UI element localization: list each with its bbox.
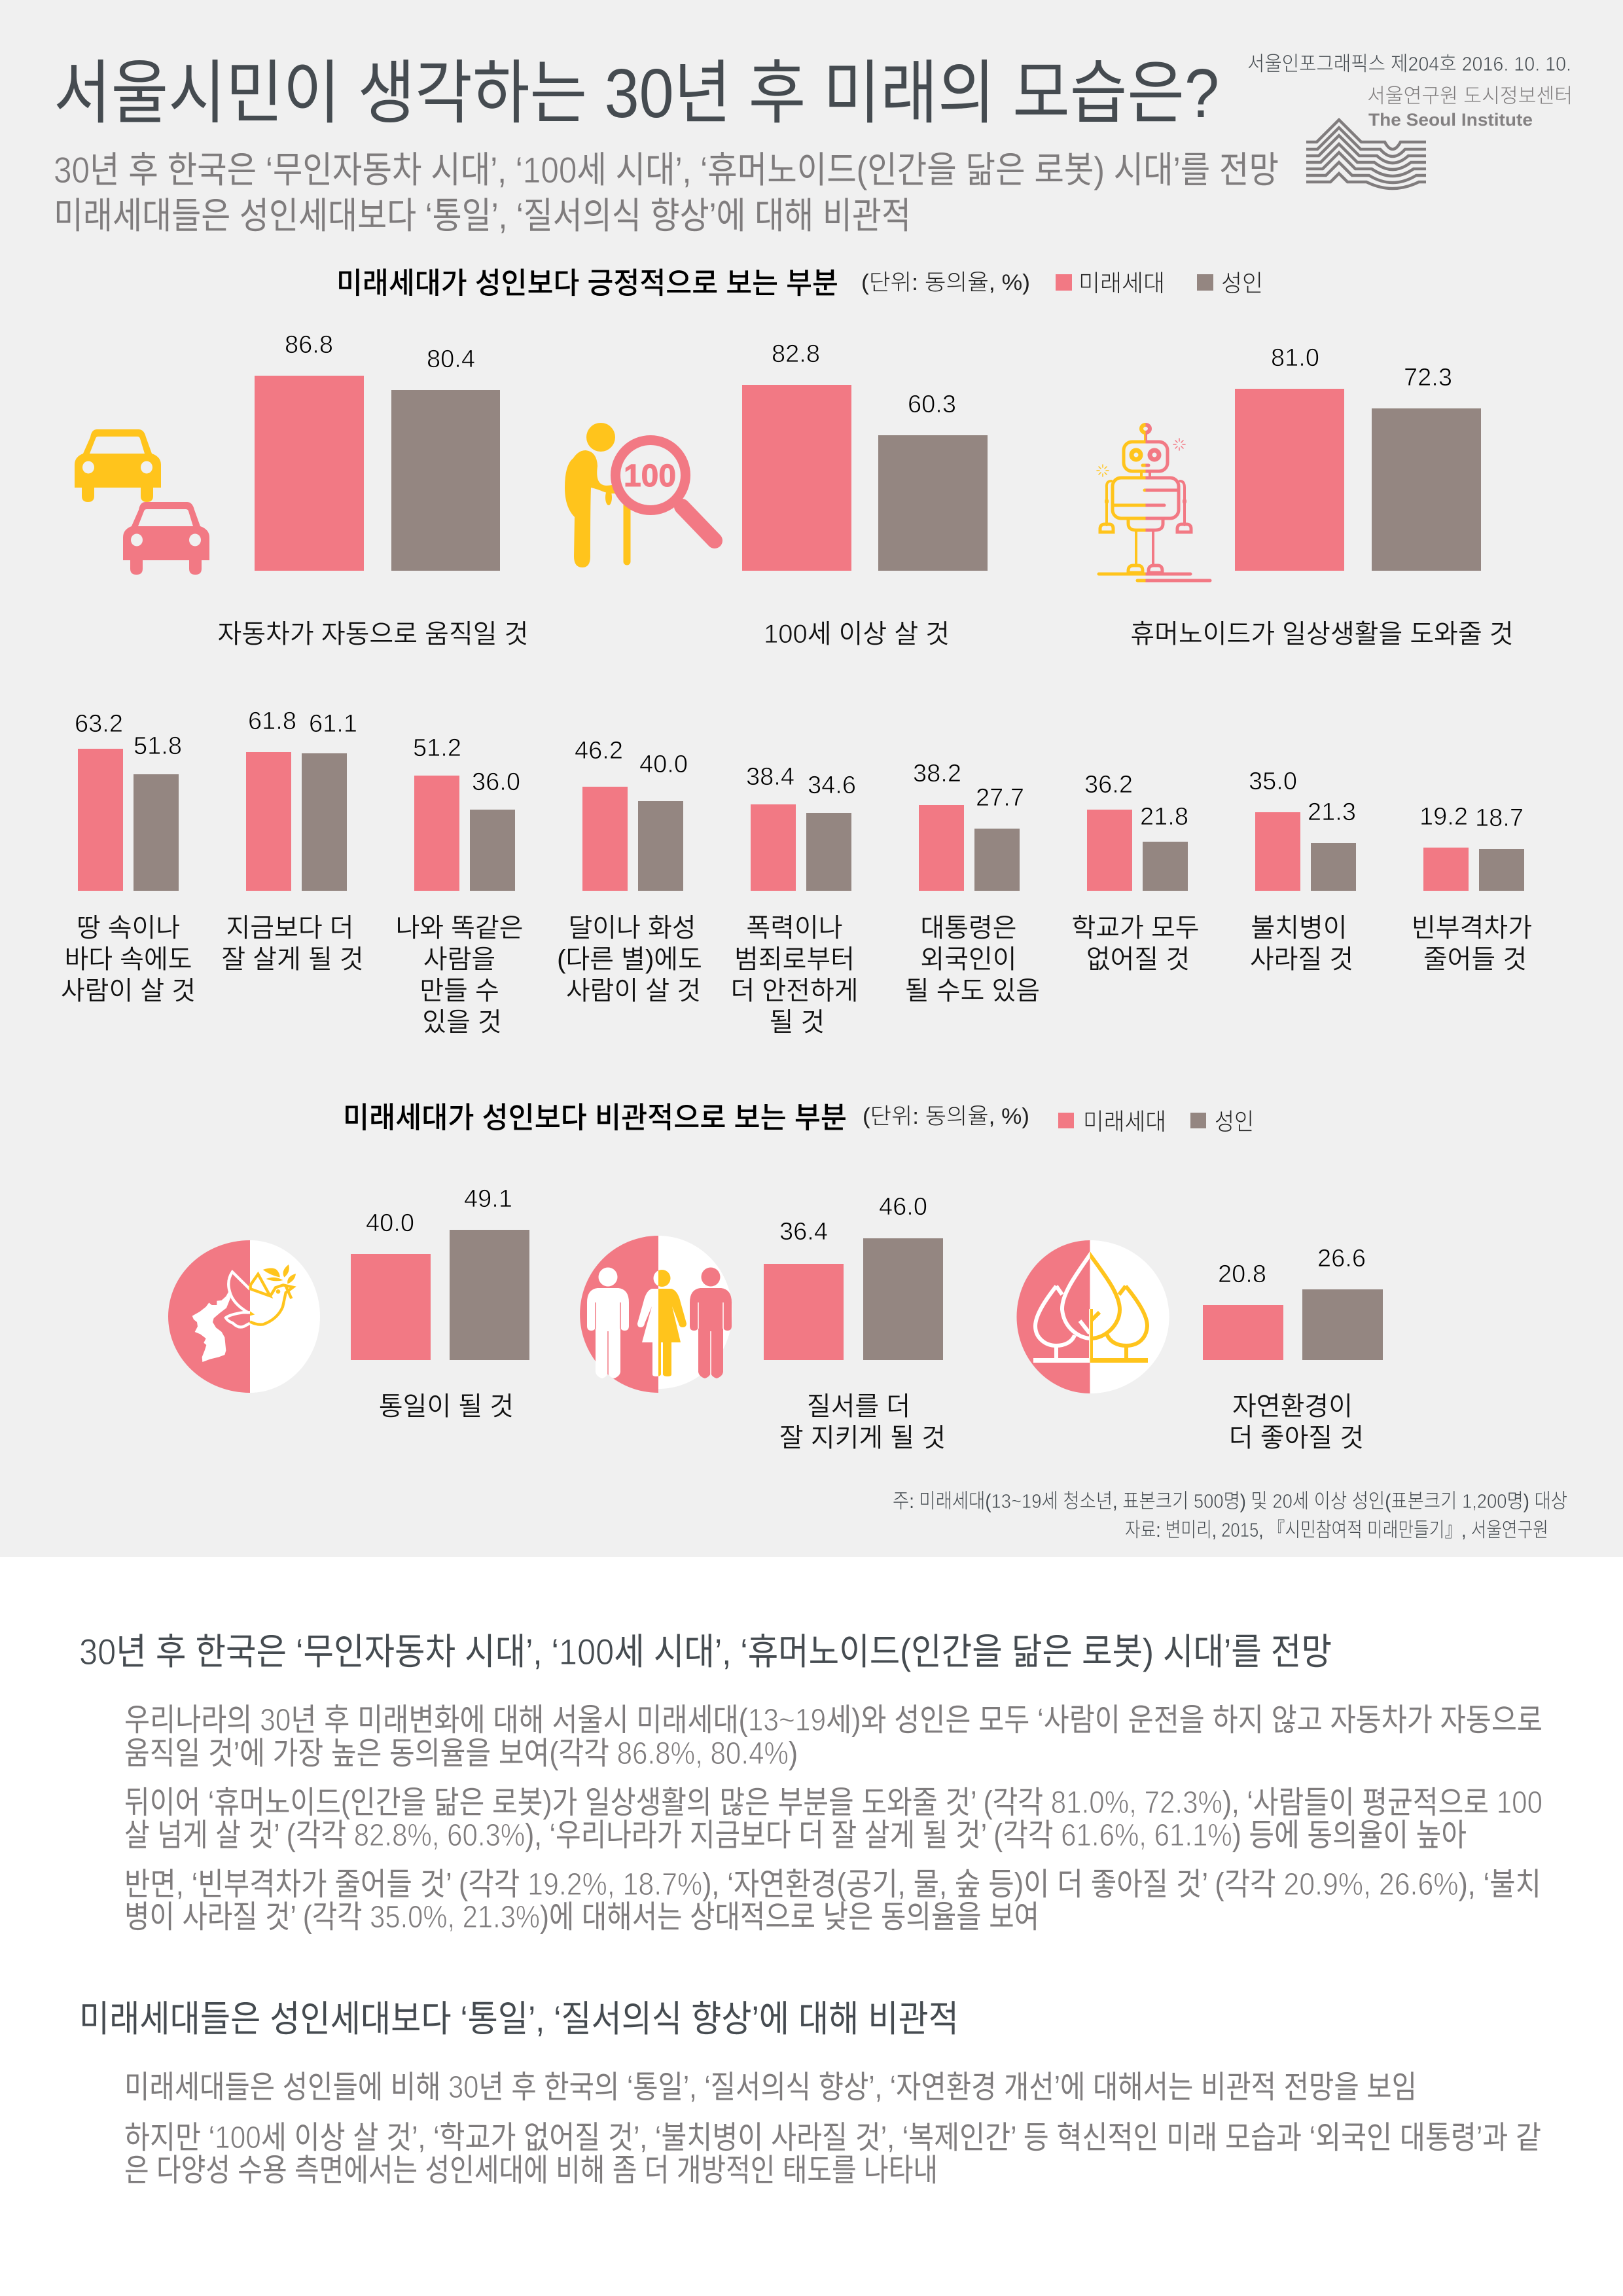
bar chart: incurable disease disappearing: 35.0 (1249, 768, 1297, 795)
bar chart: wealth gap shrinking: 19.2 (1419, 803, 1468, 831)
bar chart: incurable disease disappearing: 21.3 (1308, 798, 1356, 826)
legend: positive section: 성인 (1221, 270, 1263, 296)
icon: two cars (75, 429, 209, 575)
label: foreign president: 외국인이 (920, 945, 1017, 974)
text block: first findings: 우리나라의 30년 후 미래변화에 대해 서울시 미래세대(13~19세)와 성인은 모두 ‘사람이 운전을 하지 않고 자동차가 자동으로 (124, 1703, 1543, 1738)
bar chart: safer from crime (746, 763, 856, 891)
panel: gray header and charts background (0, 0, 1623, 1557)
bar chart: self-driving cars: 80.4 (427, 346, 475, 373)
bar chart: foreign president (913, 760, 1024, 891)
unit note: (단위: 동의율, %) (863, 1104, 1029, 1129)
heading: positive section: 미래세대가 성인보다 긍정적으로 보는 부분 (336, 266, 838, 300)
icon: Seoul Institute logo (1306, 120, 1426, 188)
bar chart: living on other planets (575, 737, 688, 891)
label: schools disappearing (1071, 914, 1200, 974)
bar chart: natural environment: 26.6 (1317, 1245, 1366, 1272)
label: foreign president (905, 914, 1040, 1005)
label: safer from crime: 범죄로부터 (734, 945, 855, 974)
label: natural environment: 더 좋아질 것 (1229, 1424, 1364, 1452)
label: living past 100: 100세 이상 살 것 (764, 620, 950, 649)
text block: first findings: 반면, ‘빈부격차가 줄어들 것’ (각각 19.2%, 18.7%), ‘자연환경(공기, 물, 숲 등)이 더 좋아질 것’ (각각 20.9%, 26.6%), ‘불치 (124, 1867, 1541, 1902)
label: human clones: 나와 똑같은 (395, 914, 524, 942)
label: incurable disease disappearing (1250, 914, 1353, 974)
bar chart: incurable disease disappearing (1249, 768, 1356, 891)
unit note: (단위: 동의율, %) (861, 270, 1030, 295)
bar chart: humanoids: 81.0 (1271, 344, 1319, 372)
bar chart: foreign president: 38.2 (913, 760, 961, 787)
text block: first findings: 살 넘게 살 것’ (각각 82.8%, 60.3%), ‘우리나라가 지금보다 더 잘 살게 될 것’ (각각 61.6%, 61.1%) 등에 동의율이 높아 (124, 1818, 1467, 1853)
label: safer from crime: 더 안전하게 (730, 977, 859, 1005)
label: schools disappearing: 학교가 모두 (1071, 914, 1200, 942)
legend: negative section (1058, 1108, 1254, 1135)
label: living underground or undersea: 바다 속에도 (64, 945, 192, 974)
heading: second findings: 미래세대들은 성인세대보다 ‘통일’, ‘질서의식 향상’에 대해 비관적 (79, 1998, 959, 2039)
text block: first findings: 움직일 것’에 가장 높은 동의율을 보여(각각 86.8%, 80.4%) (124, 1736, 798, 1771)
label: living on other planets: 사람이 살 것 (566, 977, 701, 1005)
heading: negative section: 미래세대가 성인보다 비관적으로 보는 부분 (343, 1101, 847, 1134)
label: foreign president: 될 수도 있음 (905, 977, 1040, 1005)
subtitle (54, 149, 1279, 236)
label: public order: 질서를 더 (807, 1392, 910, 1421)
bar chart: safer from crime: 34.6 (808, 772, 856, 799)
bar chart: better living: 61.8 (248, 708, 296, 735)
subtitle: 30년 후 한국은 ‘무인자동차 시대’, ‘100세 시대’, ‘휴머노이드(인간을 닮은 로봇) 시대’를 전망 (54, 149, 1279, 190)
icon: robot (1097, 425, 1210, 581)
label: wealth gap shrinking (1412, 914, 1532, 974)
legend: positive section (1056, 270, 1263, 296)
footnote (893, 1490, 1567, 1541)
icon: elderly person with magnifier: 100 (624, 459, 676, 493)
label: safer from crime (730, 914, 859, 1037)
bar chart: human clones: 51.2 (413, 734, 461, 762)
legend: negative section: 성인 (1215, 1108, 1254, 1135)
label: public order (779, 1392, 946, 1452)
footnote: 자료: 변미리, 2015, 『시민참여적 미래만들기』, 서울연구원 (1125, 1518, 1548, 1541)
icon: dove and Korean peninsula (168, 1240, 320, 1393)
publisher name: 서울연구원 도시정보센터 (1367, 84, 1573, 107)
publisher name: The Seoul Institute (1368, 110, 1533, 130)
bar chart: better living (246, 708, 357, 891)
bar chart: living past 100 (742, 340, 988, 571)
label: better living: 잘 살게 될 것 (221, 945, 364, 974)
label: schools disappearing: 없어질 것 (1086, 945, 1190, 974)
label: human clones (395, 914, 524, 1037)
bar chart: schools disappearing: 36.2 (1084, 771, 1133, 798)
label: better living (221, 914, 364, 974)
label: public order: 잘 지키게 될 것 (779, 1424, 946, 1452)
bar chart: public order: 46.0 (879, 1193, 927, 1221)
label: human clones: 사람을 (423, 945, 495, 974)
icon: three people (580, 1236, 732, 1393)
icon: elderly person with magnifier (565, 423, 715, 567)
bar chart: safer from crime: 38.4 (746, 763, 794, 791)
bar chart: natural environment (1203, 1245, 1383, 1360)
bar chart: better living: 61.1 (309, 710, 357, 738)
legend: positive section: 미래세대 (1079, 270, 1165, 296)
bar chart: unification: 49.1 (464, 1185, 512, 1213)
label: safer from crime: 폭력이나 (746, 914, 843, 942)
label: human clones: 만들 수 (419, 977, 499, 1005)
label: wealth gap shrinking: 빈부격차가 (1412, 914, 1532, 942)
bar chart: wealth gap shrinking (1419, 803, 1524, 891)
text block: first findings: 뒤이어 ‘휴머노이드(인간을 닮은 로봇)가 일상생활의 많은 부분을 도와줄 것’ (각각 81.0%, 72.3%), ‘사람들이 평균적으로 100 (124, 1785, 1543, 1820)
bar chart: humanoids: 72.3 (1404, 364, 1452, 391)
bar chart: humanoids (1235, 344, 1481, 571)
label: natural environment (1229, 1392, 1364, 1452)
subtitle: 미래세대들은 성인세대보다 ‘통일’, ‘질서의식 향상’에 대해 비관적 (54, 195, 911, 236)
title: 서울시민이 생각하는 30년 후 미래의 모습은? (54, 55, 1219, 132)
bar chart: self-driving cars (255, 331, 500, 571)
label: humanoids: 휴머노이드가 일상생활을 도와줄 것 (1130, 620, 1514, 649)
label: safer from crime: 될 것 (770, 1008, 825, 1037)
bar chart: public order (764, 1193, 943, 1360)
bar chart: living past 100: 82.8 (772, 340, 820, 368)
bar chart: unification (351, 1185, 529, 1360)
icon: trees (1017, 1240, 1169, 1393)
footnote: 주: 미래세대(13~19세 청소년, 표본크기 500명) 및 20세 이상 성인(표본크기 1,200명) 대상 (893, 1490, 1567, 1513)
bar chart: unification: 40.0 (366, 1210, 414, 1237)
bar chart: living underground or undersea: 51.8 (134, 732, 182, 760)
bar chart: living on other planets: 46.2 (575, 737, 623, 764)
text block: second findings: 은 다양성 수용 측면에서는 성인세대에 비해 좀 더 개방적인 태도를 나타내 (124, 2153, 938, 2188)
label: living on other planets: (다른 별)에도 (557, 945, 702, 974)
bar chart: human clones (413, 734, 520, 891)
bar chart: living past 100: 60.3 (908, 391, 956, 418)
label: incurable disease disappearing: 사라질 것 (1250, 945, 1353, 974)
publisher name (1367, 84, 1573, 130)
bar chart: wealth gap shrinking: 18.7 (1475, 804, 1524, 832)
text block: first findings: 병이 사라질 것’ (각각 35.0%, 21.3%)에 대해서는 상대적으로 낮은 동의율을 보여 (124, 1900, 1039, 1935)
bar chart: schools disappearing (1084, 771, 1188, 891)
bar chart: living underground or undersea: 63.2 (75, 710, 123, 738)
label: foreign president: 대통령은 (920, 914, 1017, 942)
label: human clones: 있을 것 (422, 1008, 502, 1037)
bar chart: foreign president: 27.7 (976, 784, 1024, 812)
text block: second findings: 미래세대들은 성인들에 비해 30년 후 한국의 ‘통일’, ‘질서의식 향상’, ‘자연환경 개선’에 대해서는 비관적 전망을 보임 (124, 2070, 1417, 2105)
heading: first findings: 30년 후 한국은 ‘무인자동차 시대’, ‘100세 시대’, ‘휴머노이드(인간을 닮은 로봇) 시대’를 전망 (79, 1631, 1332, 1672)
text block: second findings (124, 2070, 1541, 2188)
text block: first findings (124, 1703, 1543, 1935)
bar chart: natural environment: 20.8 (1218, 1261, 1266, 1288)
label: incurable disease disappearing: 불치병이 (1251, 914, 1347, 942)
label: living on other planets (557, 914, 702, 1005)
label: better living: 지금보다 더 (226, 914, 354, 942)
label: living underground or undersea: 땅 속이나 (77, 914, 180, 942)
label: natural environment: 자연환경이 (1232, 1392, 1353, 1421)
label: living underground or undersea: 사람이 살 것 (61, 977, 196, 1005)
bar chart: public order: 36.4 (779, 1218, 828, 1246)
issue information: 서울인포그래픽스 제204호 2016. 10. 10. (1247, 52, 1571, 75)
label: living underground or undersea (61, 914, 196, 1005)
bar chart: human clones: 36.0 (472, 768, 520, 796)
bar chart: living underground or undersea (75, 710, 182, 891)
label: living on other planets: 달이나 화성 (568, 914, 696, 942)
label: wealth gap shrinking: 줄어들 것 (1423, 945, 1527, 974)
label: unification: 통일이 될 것 (379, 1392, 514, 1421)
label: self-driving cars: 자동차가 자동으로 움직일 것 (218, 620, 528, 649)
legend: negative section: 미래세대 (1083, 1108, 1166, 1135)
bar chart: schools disappearing: 21.8 (1140, 803, 1188, 831)
bar chart: living on other planets: 40.0 (639, 751, 688, 778)
bar chart: self-driving cars: 86.8 (285, 331, 333, 359)
